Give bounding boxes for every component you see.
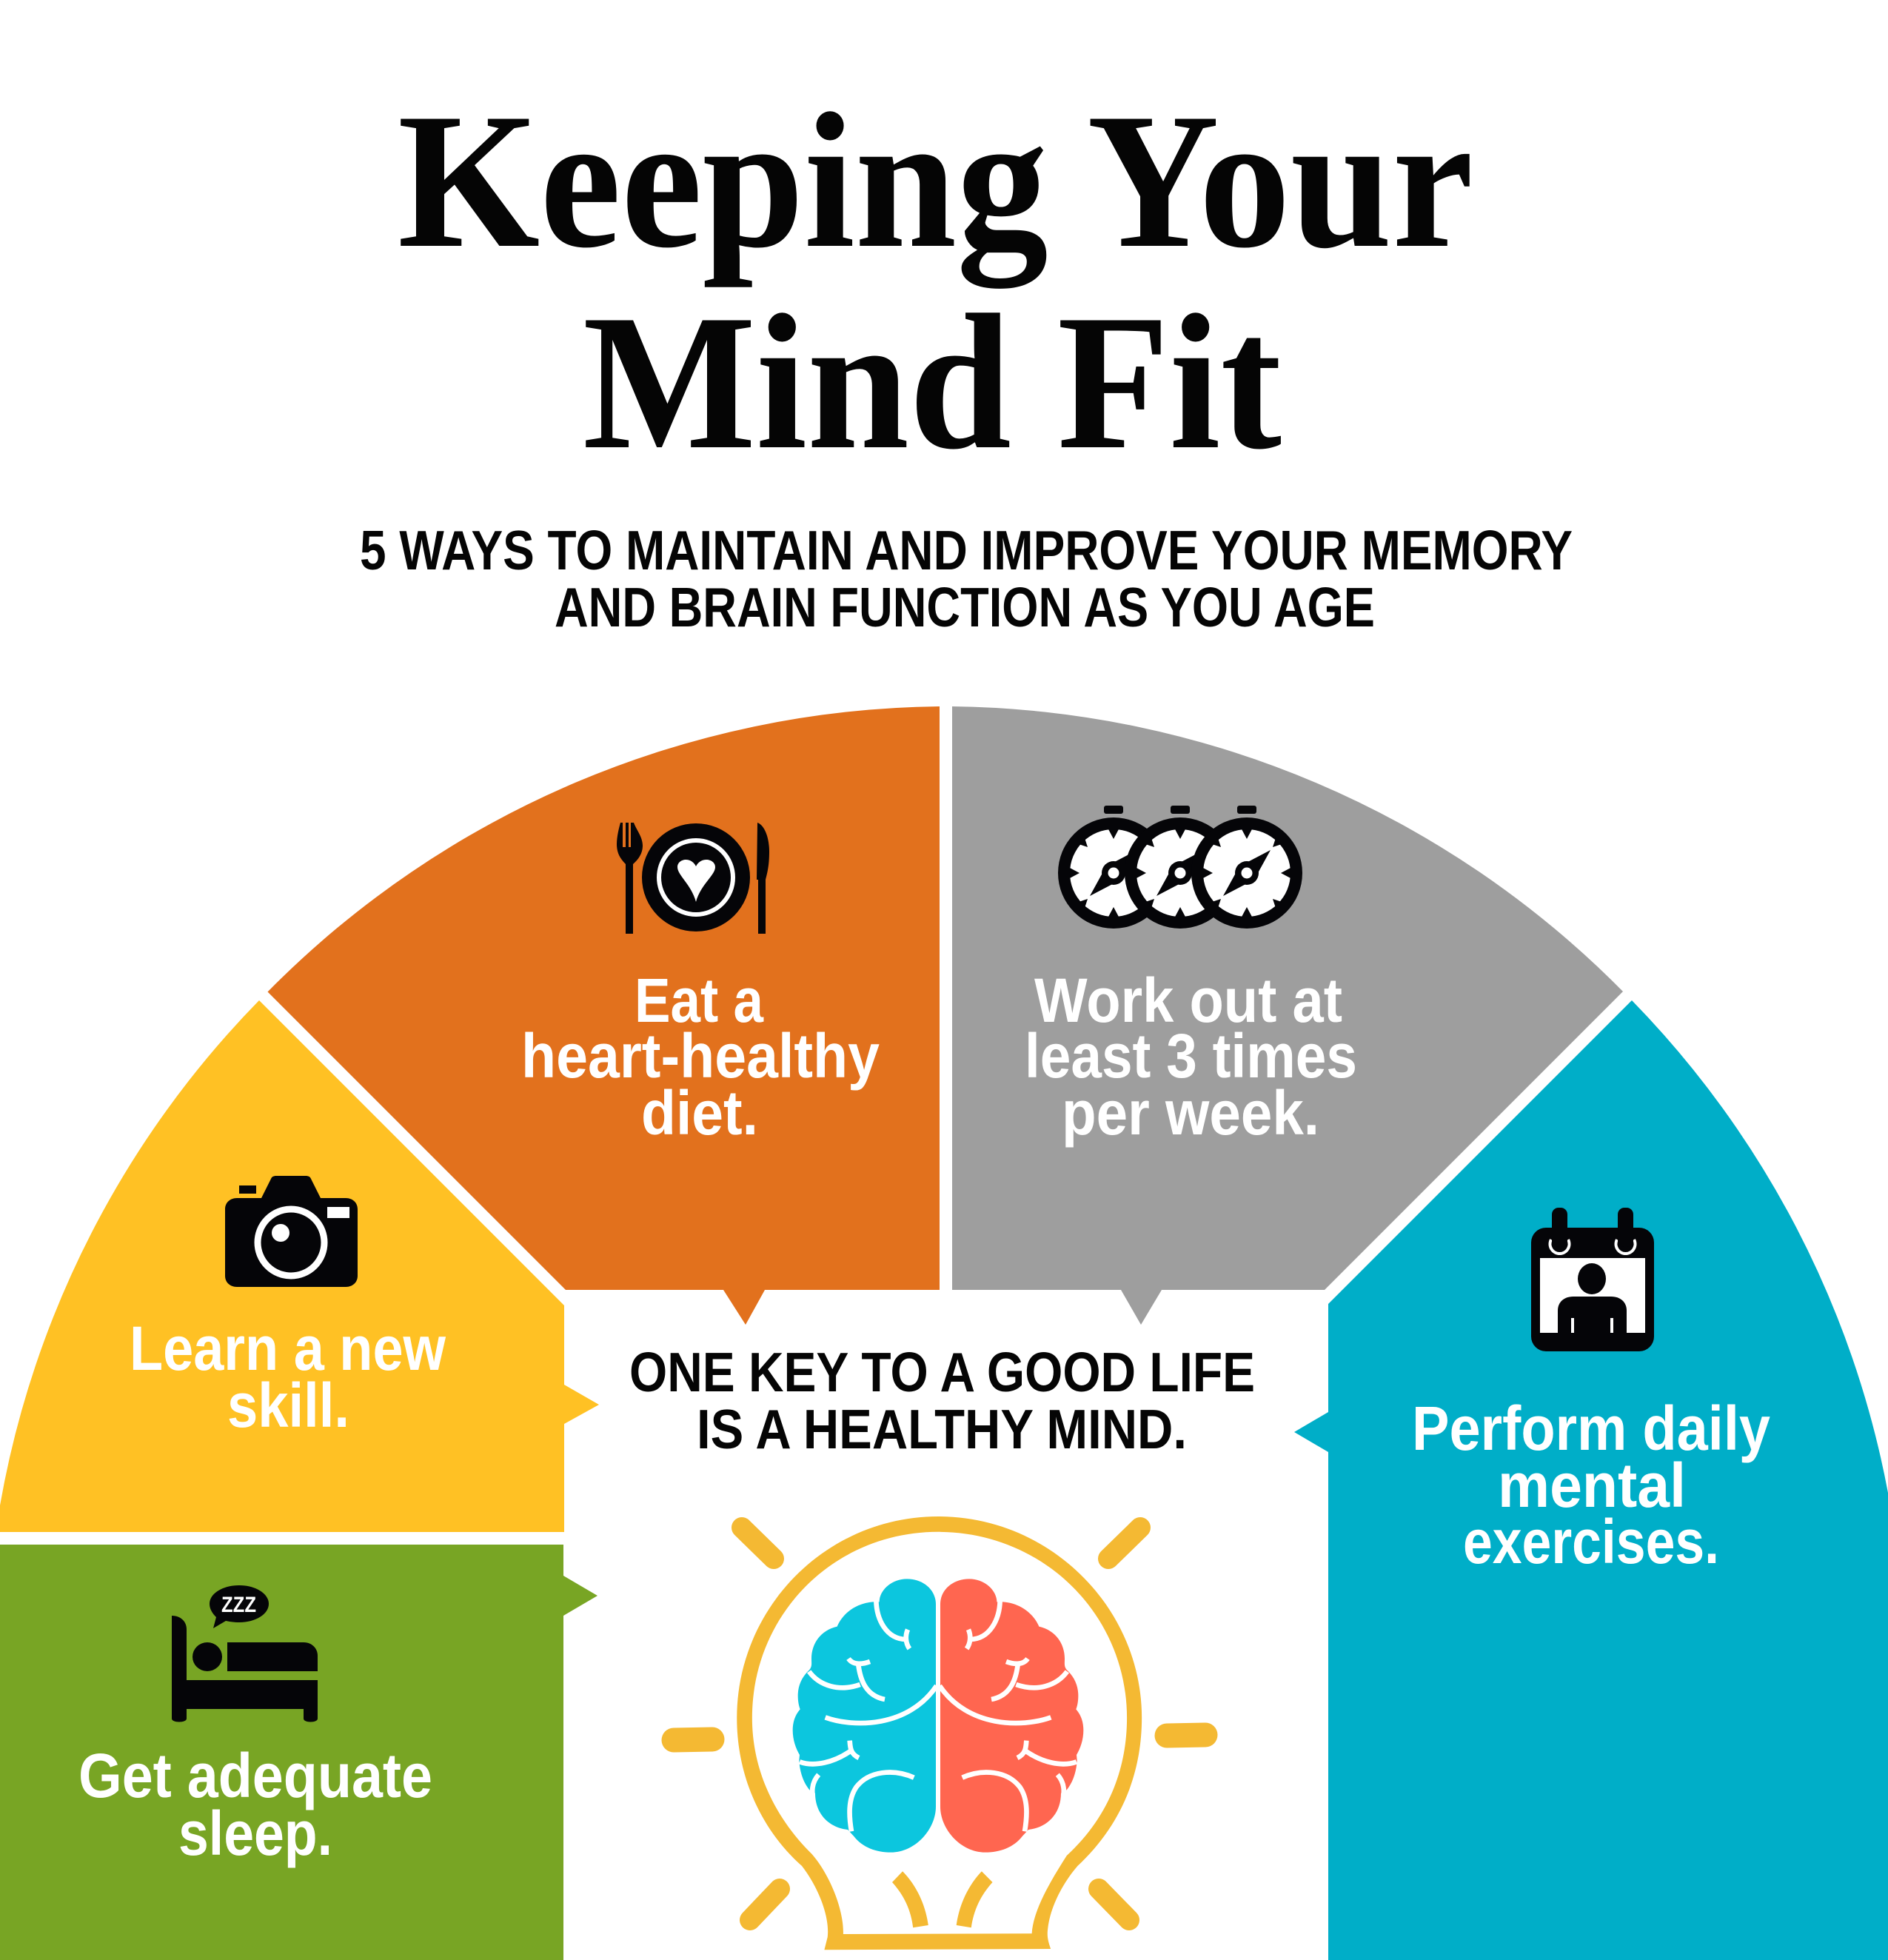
label: perform daily mental exercises: mental — [1498, 1451, 1686, 1520]
bulb outline — [737, 1516, 1142, 1950]
title — [398, 73, 1473, 489]
label: work out at least 3 times per week: least 3 times — [1025, 1021, 1357, 1091]
label: get adequate sleep: sleep. — [178, 1799, 332, 1868]
icon: light bulb with brain — [674, 1516, 1205, 1950]
light rays — [674, 1528, 1205, 1920]
subtitle: 5 WAYS TO MAINTAIN AND IMPROVE YOUR MEMORY — [360, 519, 1573, 581]
subtitle: AND BRAIN FUNCTION AS YOU AGE — [555, 576, 1375, 638]
grey wedge with pointer — [952, 706, 1623, 1325]
label: learn a new skill — [130, 1314, 446, 1440]
icon: fork, plate with heart and knife — [617, 823, 769, 934]
icon: three stopwatches — [1058, 806, 1302, 929]
brain: right hemisphere — [940, 1579, 1083, 1853]
panel: get adequate sleep — [0, 1545, 597, 1960]
label: perform daily mental exercises — [1412, 1394, 1770, 1576]
green block with pointer — [0, 1545, 597, 1960]
centre statement: ONE KEY TO A GOOD LIFE — [629, 1341, 1255, 1403]
bulb filaments — [892, 1871, 993, 1927]
blue wedge with pointer — [1294, 1000, 1888, 1960]
brain: left hemisphere — [793, 1579, 937, 1853]
label: eat a heart-healthy diet: heart-healthy — [521, 1021, 880, 1091]
panel: perform daily mental exercises — [1294, 1000, 1888, 1960]
panel: eat a heart-healthy diet — [268, 706, 940, 1325]
label: eat a heart-healthy diet: Eat a — [635, 966, 764, 1035]
yellow wedge with pointer — [0, 1000, 599, 1532]
title: Mind Fit — [583, 275, 1284, 489]
orange wedge with pointer — [268, 706, 940, 1325]
centre statement — [629, 1341, 1255, 1460]
icon: person sleeping in bed: ZZZ — [221, 1593, 256, 1617]
label: work out at least 3 times per week — [1025, 966, 1357, 1148]
icon: calendar with person — [1531, 1208, 1654, 1351]
label: get adequate sleep: Get adequate — [78, 1741, 432, 1810]
label: perform daily mental exercises: exercises. — [1463, 1507, 1719, 1576]
panel: learn a new skill — [0, 1000, 599, 1532]
label: work out at least 3 times per week: per week. — [1062, 1078, 1319, 1148]
label: eat a heart-healthy diet: diet. — [641, 1078, 758, 1148]
icon: person sleeping in bed — [172, 1585, 318, 1722]
centre statement: IS A HEALTHY MIND. — [697, 1398, 1187, 1460]
label: perform daily mental exercises: Perform daily — [1412, 1394, 1770, 1463]
icon: camera — [225, 1176, 358, 1287]
panel: work out — [952, 706, 1623, 1325]
label: get adequate sleep — [78, 1741, 432, 1868]
subtitle — [360, 519, 1573, 638]
label: work out at least 3 times per week: Work out at — [1034, 966, 1342, 1035]
title: Keeping Your — [398, 73, 1473, 291]
label: learn a new skill: skill. — [227, 1371, 349, 1440]
label: learn a new skill: Learn a new — [130, 1314, 446, 1383]
label: eat a heart-healthy diet — [521, 966, 880, 1148]
